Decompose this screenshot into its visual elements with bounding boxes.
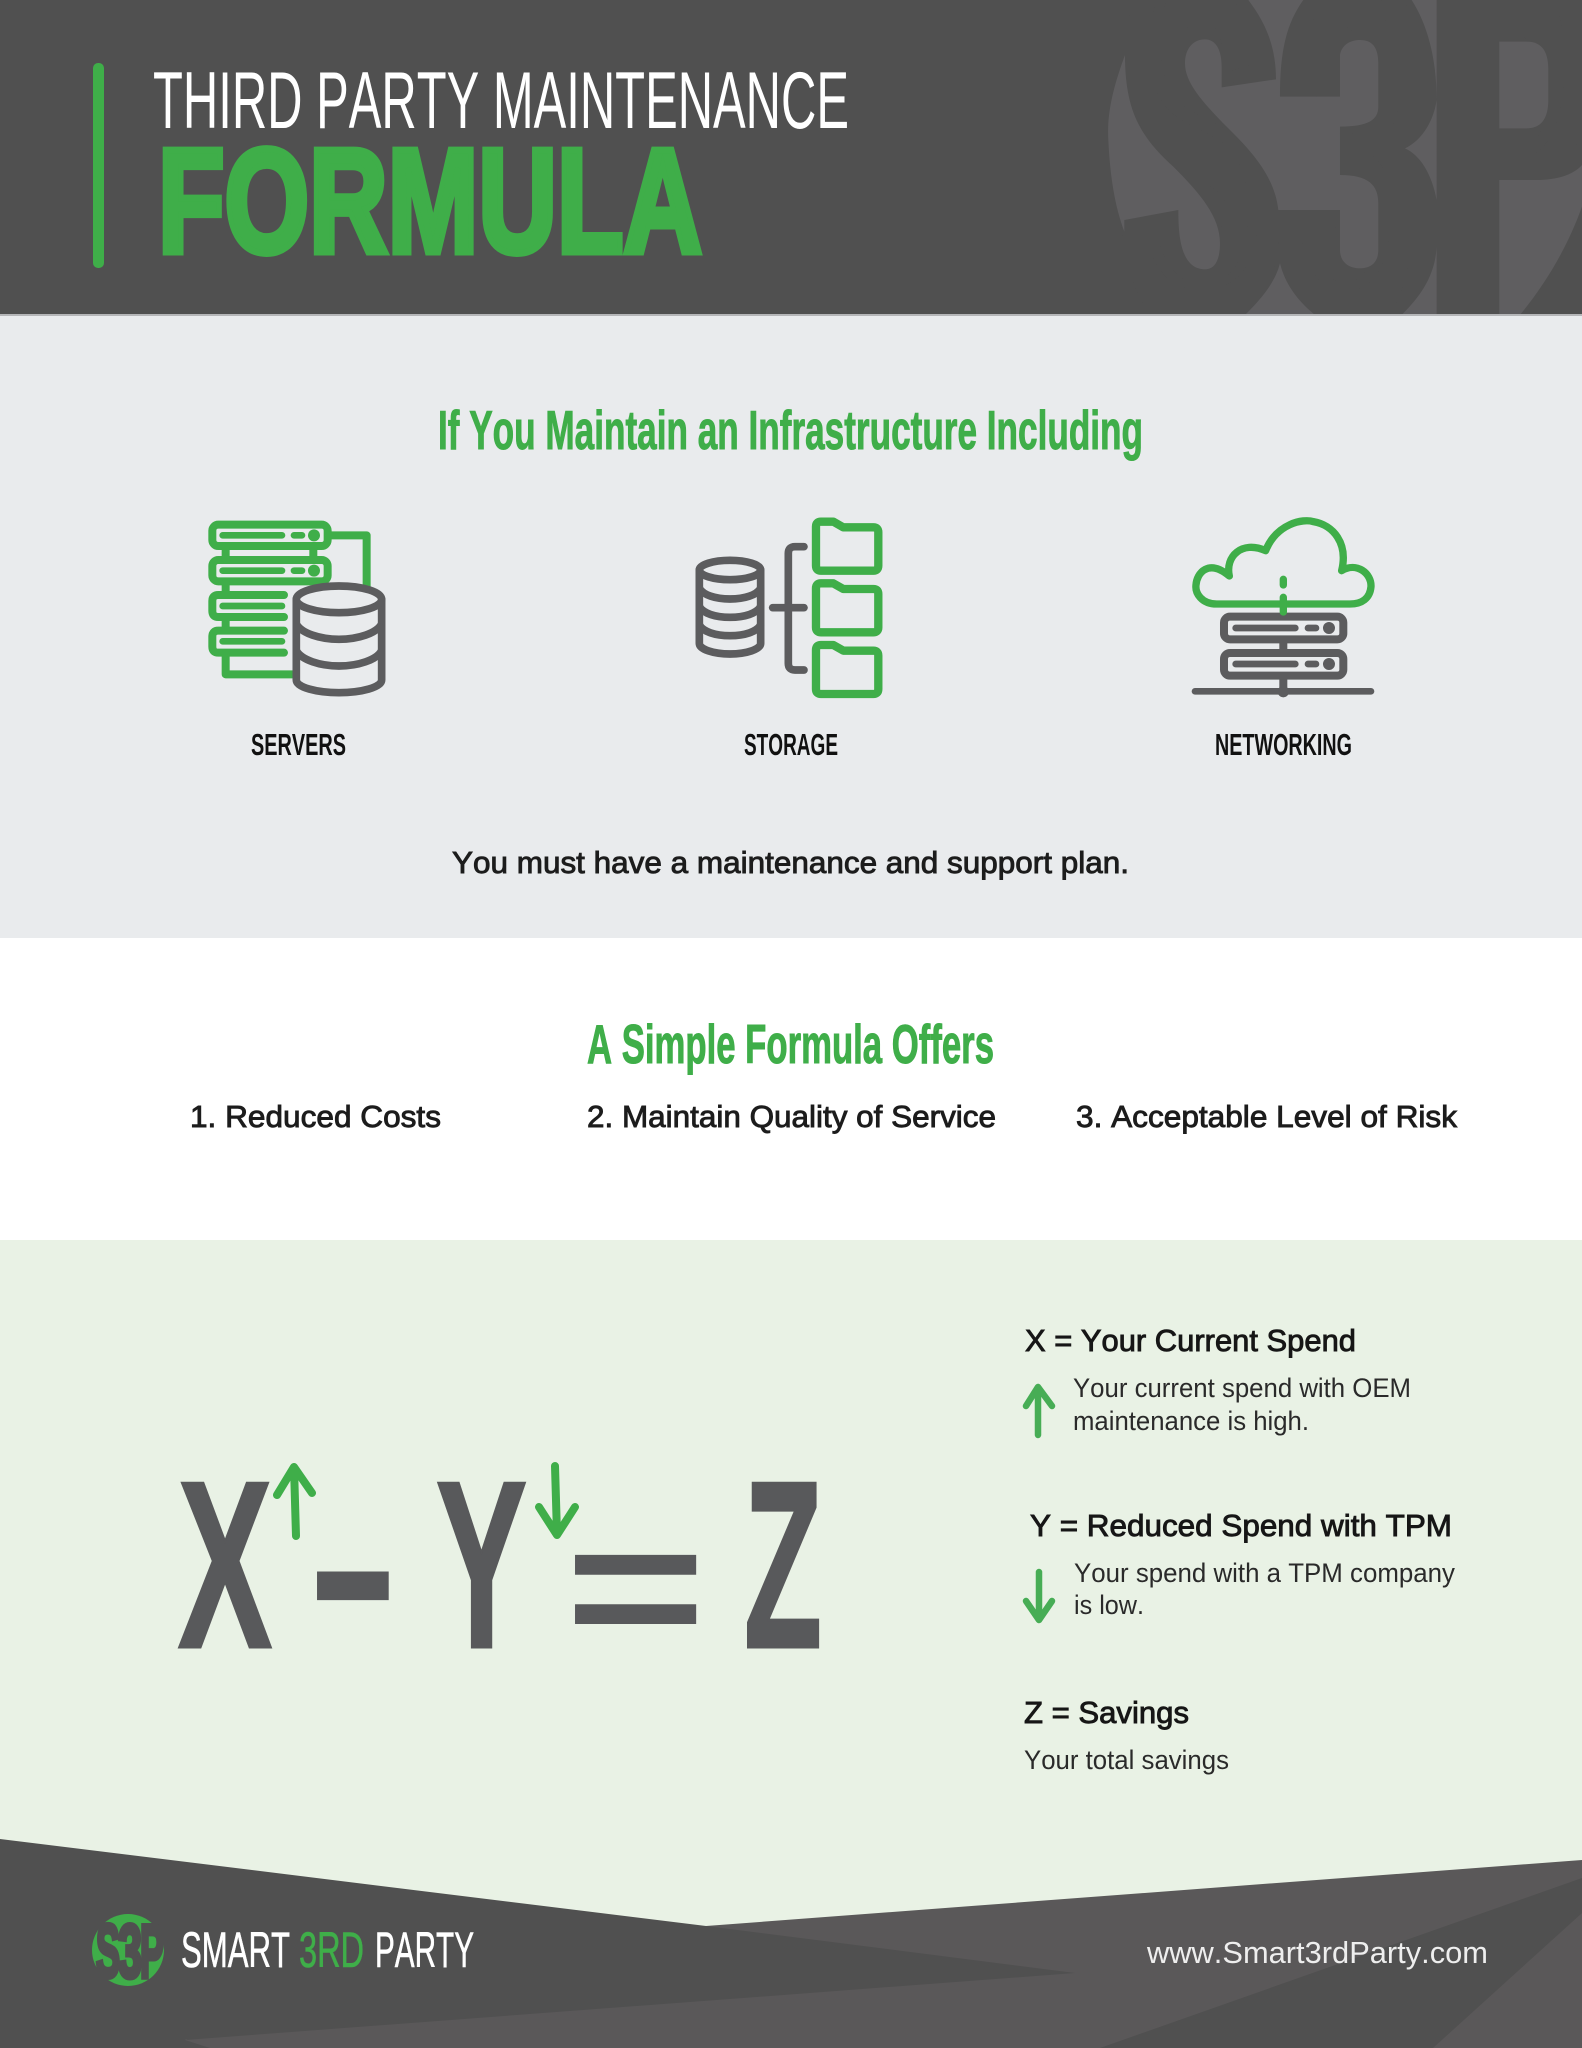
accent bar xyxy=(93,63,104,268)
description: X: Your current spend with OEM xyxy=(1073,1373,1411,1403)
description: Y xyxy=(1074,1558,1455,1620)
arrow: formula up xyxy=(277,1467,312,1536)
description: Z: Your total savings xyxy=(1024,1745,1229,1775)
arrow: down xyxy=(1026,1572,1052,1620)
heading: a simple formula offers: A Simple Formula Offers xyxy=(587,1013,994,1075)
icon: storage xyxy=(699,522,878,694)
logo wordmark: smart 3rd party xyxy=(181,1922,474,1978)
arrow: formula down xyxy=(539,1466,575,1535)
watermark: S3P xyxy=(1108,0,1582,314)
title: third party maintenance: THIRD PARTY MAINTENANCE xyxy=(153,56,849,146)
formula: minus: - xyxy=(306,1431,400,1699)
icon: servers xyxy=(212,525,382,693)
list item 3: 3. Acceptable Level of Risk xyxy=(1076,1099,1457,1134)
heading: if you maintain an infrastructure: If You Maintain an Infrastructure Including xyxy=(438,399,1143,461)
logo: S3P circle: 3 xyxy=(118,1909,142,1993)
text: maintenance and support plan: You must have a maintenance and support plan. xyxy=(452,845,1129,880)
logo: S3P circle xyxy=(92,1909,164,1993)
formula: X: X xyxy=(178,1433,272,1698)
panel: simple formula offers xyxy=(0,938,1582,1240)
icon: networking xyxy=(1195,521,1371,697)
formula equation xyxy=(178,1431,822,1699)
description: Y: is low. xyxy=(1074,1590,1144,1620)
logo: S3P circle: S xyxy=(96,1909,120,1993)
footer background xyxy=(0,1839,1582,2048)
definition: X xyxy=(1025,1323,1411,1436)
label: servers: SERVERS xyxy=(251,727,346,762)
logo wordmark: smart 3rd party: 3RD xyxy=(299,1922,364,1978)
description: X: maintenance is high. xyxy=(1073,1406,1309,1436)
text: P xyxy=(140,1909,164,1993)
description: X xyxy=(1073,1373,1411,1436)
definition: Y: Y = Reduced Spend with TPM xyxy=(1030,1508,1452,1543)
definition: Z: Z = Savings xyxy=(1024,1695,1189,1730)
logo wordmark: smart 3rd party: SMART xyxy=(181,1922,290,1978)
label: networking: NETWORKING xyxy=(1215,727,1352,762)
panel: formula background xyxy=(0,1240,1582,2048)
formula: Z: Z xyxy=(744,1433,822,1698)
formula: equals: = xyxy=(565,1485,706,1689)
list item 1: 1. Reduced Costs xyxy=(190,1099,441,1134)
label: storage: STORAGE xyxy=(744,727,838,762)
list item 2: 2. Maintain Quality of Service xyxy=(587,1099,996,1134)
definition: Y xyxy=(1026,1508,1455,1620)
arrow: up xyxy=(1026,1387,1052,1435)
panel: header xyxy=(0,0,1582,316)
title: formula: FORMULA xyxy=(158,119,702,284)
logo wordmark: smart 3rd party: PARTY xyxy=(375,1922,474,1978)
website url: www.Smart3rdParty.com xyxy=(1146,1935,1488,1970)
description: Y: Your spend with a TPM company xyxy=(1074,1558,1455,1588)
formula: Y: Y xyxy=(436,1433,527,1698)
definition: X: X = Your Current Spend xyxy=(1025,1323,1356,1358)
definition: Z xyxy=(1024,1695,1229,1775)
